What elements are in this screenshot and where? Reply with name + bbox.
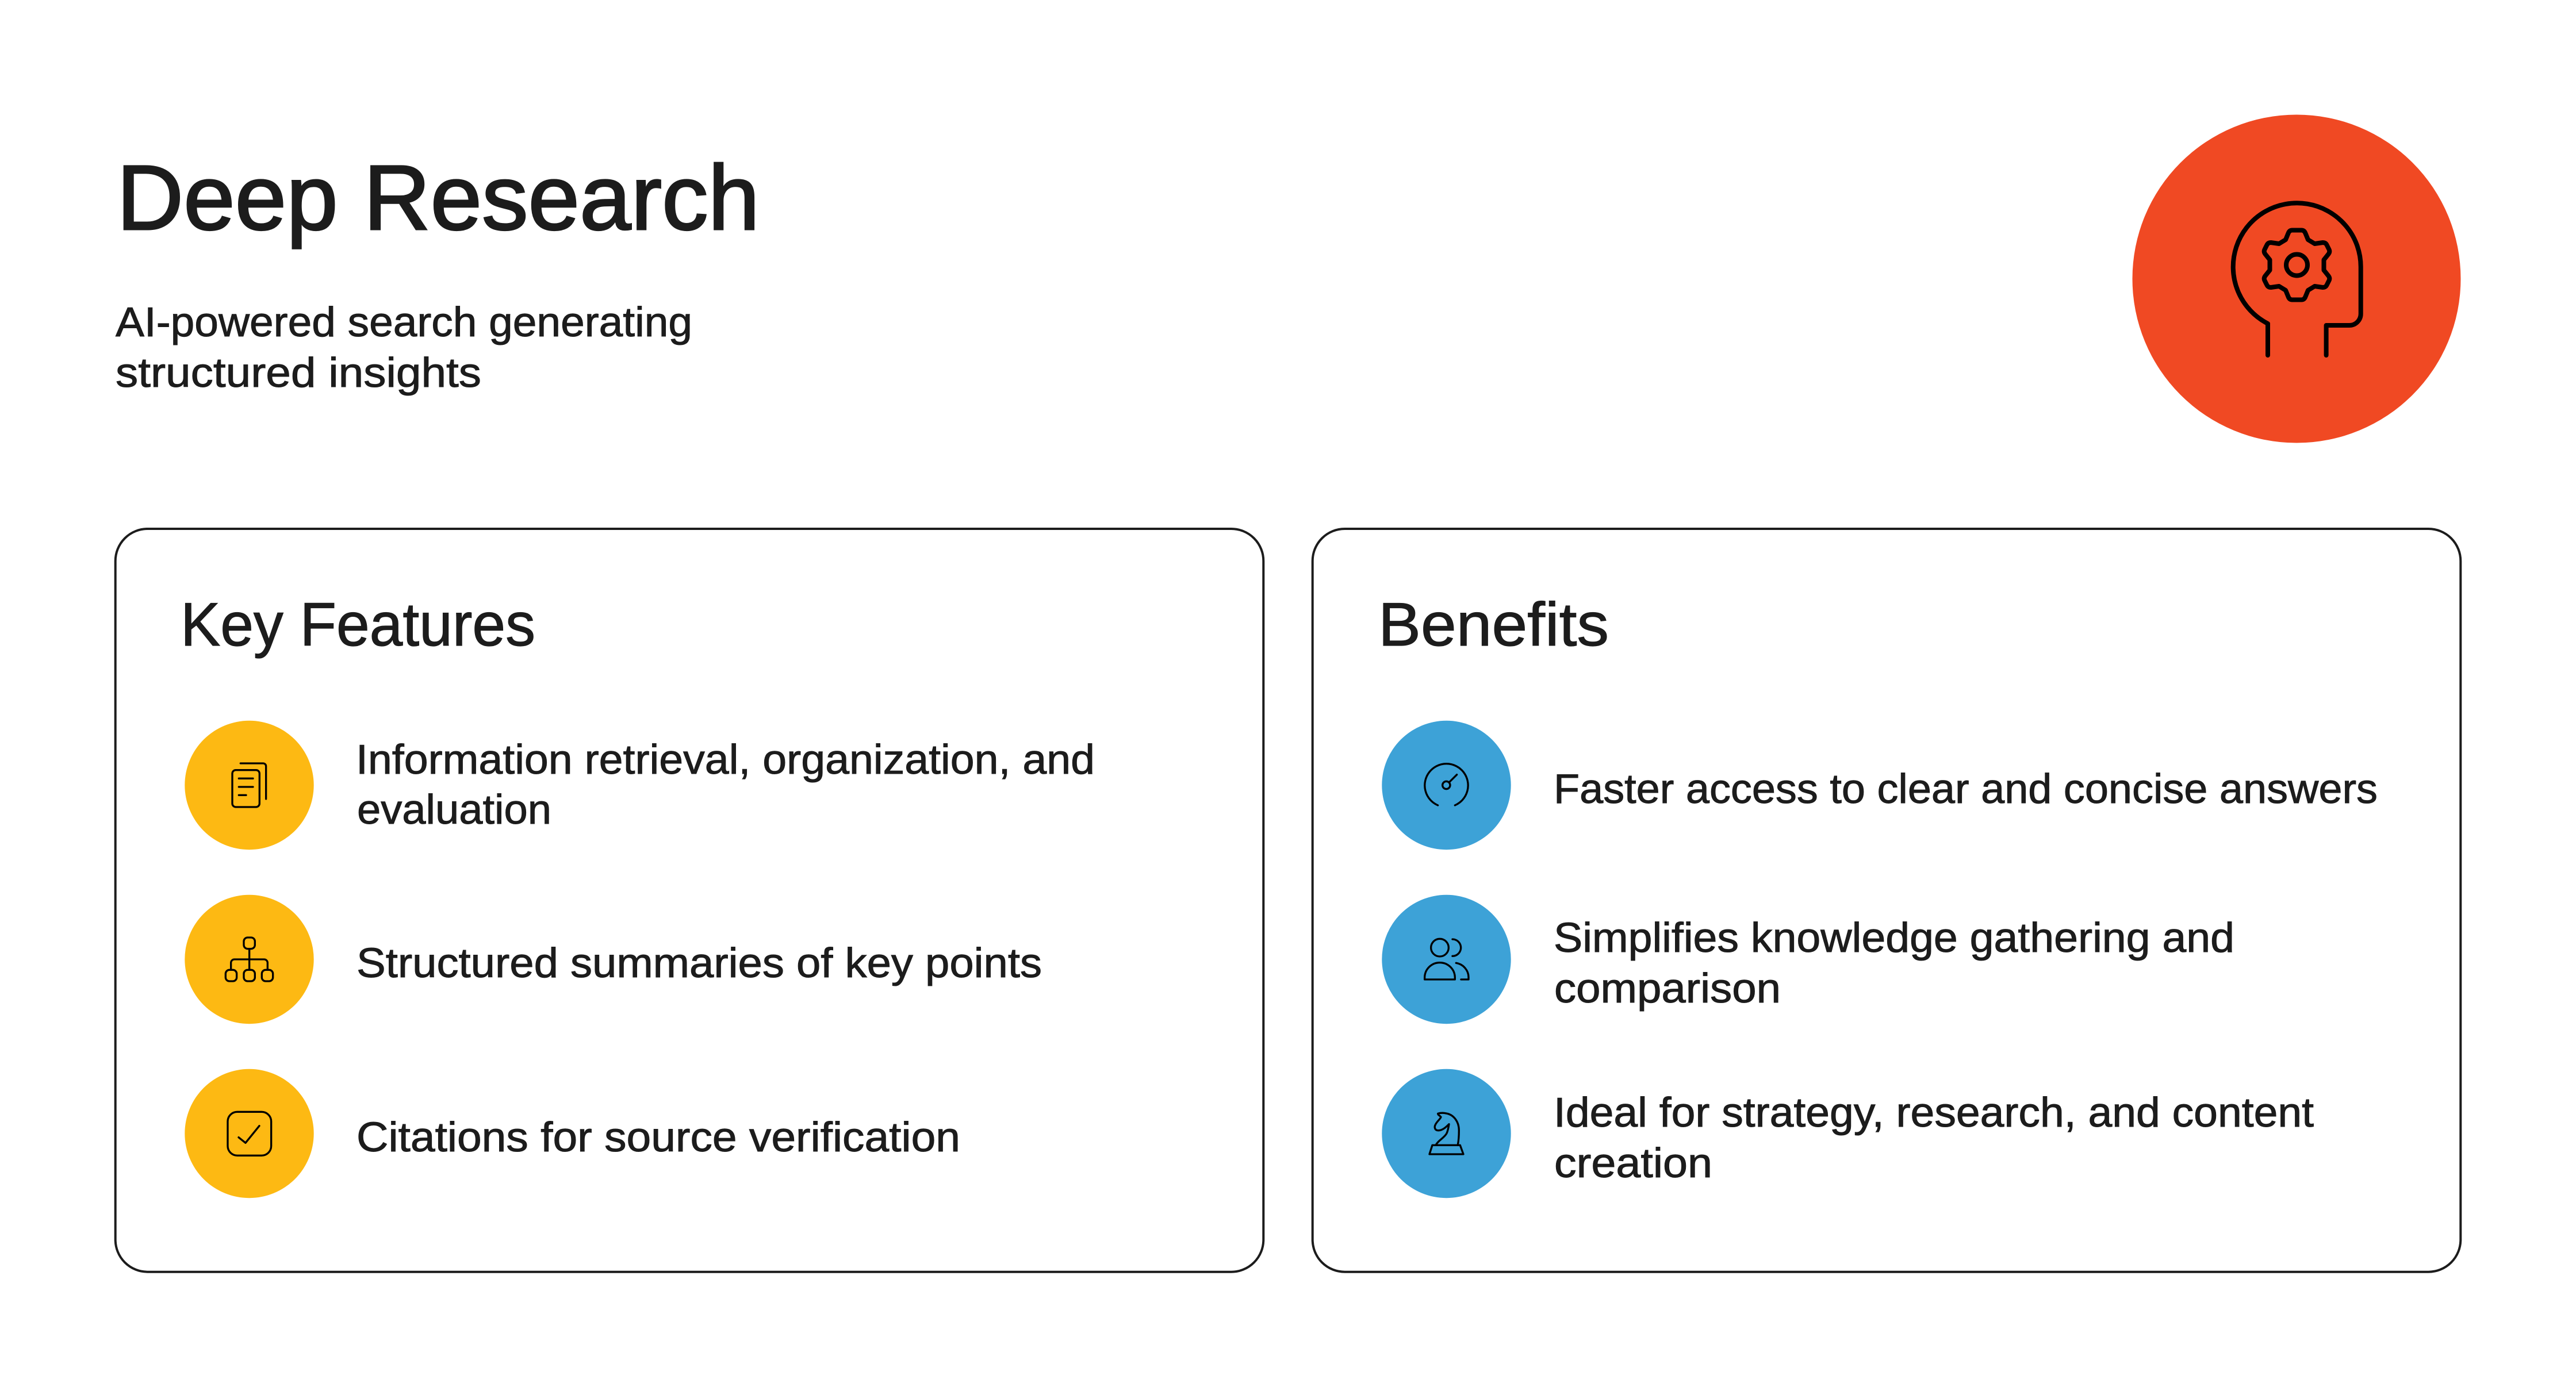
text: faster access: Faster access to clear and concise answers — [1554, 766, 2378, 812]
text: ideal for strategy — [1554, 1090, 2314, 1186]
icon: documents — [185, 721, 314, 850]
text: simplifies knowledge — [1554, 915, 2234, 1012]
text: information retrieval — [356, 737, 1095, 833]
panel: key features — [116, 529, 1263, 1272]
icon: hierarchy — [185, 895, 314, 1024]
icon: people — [1382, 895, 1511, 1024]
text: structured summaries: Structured summaries of key points — [356, 940, 1042, 986]
text: ideal for strategy: Ideal for strategy, research, and content — [1554, 1090, 2314, 1136]
text: ideal for strategy: creation — [1554, 1140, 1712, 1186]
subtitle: structured insights — [116, 350, 481, 396]
title: Deep Research — [117, 146, 760, 249]
icon: checkbox — [185, 1069, 314, 1198]
text: information retrieval: Information retrieval, organization, and — [356, 737, 1095, 783]
panel: benefits — [1313, 529, 2460, 1272]
icon: chess knight — [1382, 1069, 1511, 1198]
subtitle: AI-powered search generating — [116, 299, 692, 345]
text: simplifies knowledge: Simplifies knowledge gathering and — [1554, 915, 2234, 961]
heading: key features: Key Features — [181, 590, 535, 659]
text: simplifies knowledge: comparison — [1554, 966, 1781, 1012]
heading: benefits: Benefits — [1378, 590, 1609, 659]
text: information retrieval: evaluation — [357, 787, 551, 833]
text: citations: Citations for source verification — [356, 1115, 960, 1161]
icon: gauge — [1382, 721, 1511, 850]
subtitle — [116, 299, 692, 396]
icon: head with gear in orange circle — [2132, 115, 2461, 443]
